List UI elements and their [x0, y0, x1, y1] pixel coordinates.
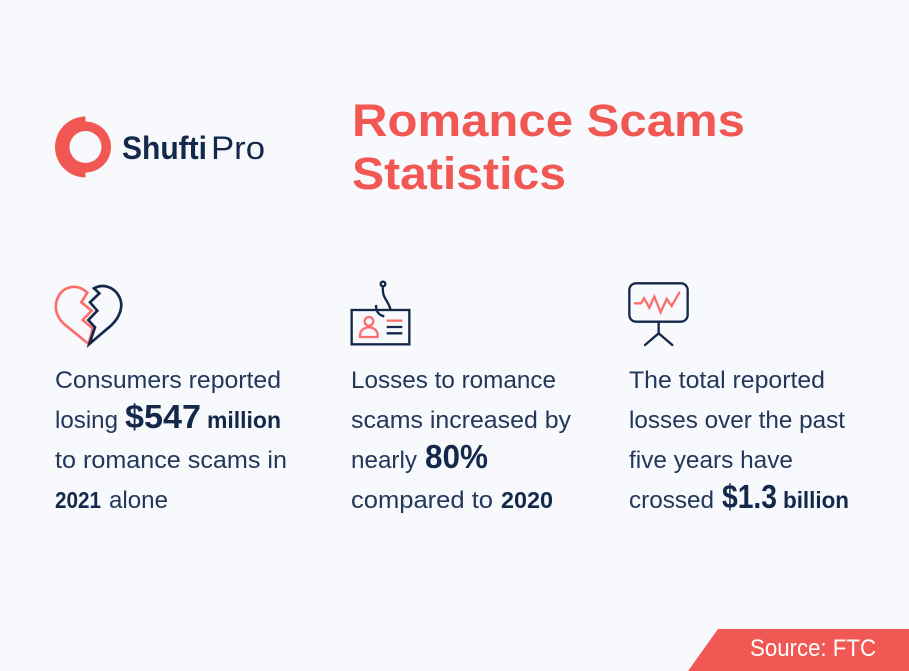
- icon: hooked ID card: [352, 282, 409, 344]
- text: nearly 80%: compared to: [351, 487, 493, 514]
- text: $1.3 billion: five years have: [629, 447, 793, 474]
- text: $547 million: 2021: [55, 487, 101, 513]
- text: $547 million: Consumers reported: [55, 367, 281, 394]
- text: $1.3 billion: crossed: [629, 487, 714, 514]
- text: $1.3 billion: [629, 367, 849, 515]
- text: nearly 80%: Losses to romance: [351, 367, 556, 394]
- panel: losses increased: [351, 282, 571, 514]
- title: Romance Scams: [352, 95, 745, 146]
- text: $547 million: alone: [109, 487, 168, 514]
- text: $1.3 billion: billion: [783, 487, 849, 513]
- text: nearly 80%: 80%: [425, 438, 488, 475]
- text: $547 million: $547: [125, 398, 201, 435]
- text: $547 million: losing: [55, 407, 118, 434]
- icon: logo ring: [55, 116, 111, 178]
- text: nearly 80%: [351, 367, 571, 514]
- text: $1.3 billion: losses over the past: [629, 407, 845, 434]
- source tag: Source: FTC: [750, 635, 876, 662]
- source tag: [688, 629, 909, 671]
- text: $547 million: to romance scams in: [55, 447, 287, 474]
- icon: presentation board chart: [629, 283, 688, 345]
- icon: broken heart: [56, 286, 121, 344]
- text: nearly 80%: 2020: [501, 487, 553, 513]
- text: $547 million: million: [207, 407, 281, 433]
- text: $1.3 billion: The total reported: [629, 367, 825, 394]
- title: [352, 95, 745, 199]
- logo: Shufti Pro: [55, 116, 265, 178]
- logo wordmark: Shufti: [122, 130, 207, 166]
- panel: five year total: [629, 283, 849, 515]
- text: $547 million: [55, 367, 287, 514]
- text: nearly 80%: nearly: [351, 447, 417, 474]
- text: $1.3 billion: $1.3: [722, 478, 777, 515]
- title: Statistics: [352, 148, 566, 199]
- panel: consumers reported losses: [55, 286, 287, 514]
- text: nearly 80%: scams increased by: [351, 407, 571, 434]
- logo wordmark: [122, 130, 265, 166]
- logo wordmark: Pro: [211, 130, 265, 166]
